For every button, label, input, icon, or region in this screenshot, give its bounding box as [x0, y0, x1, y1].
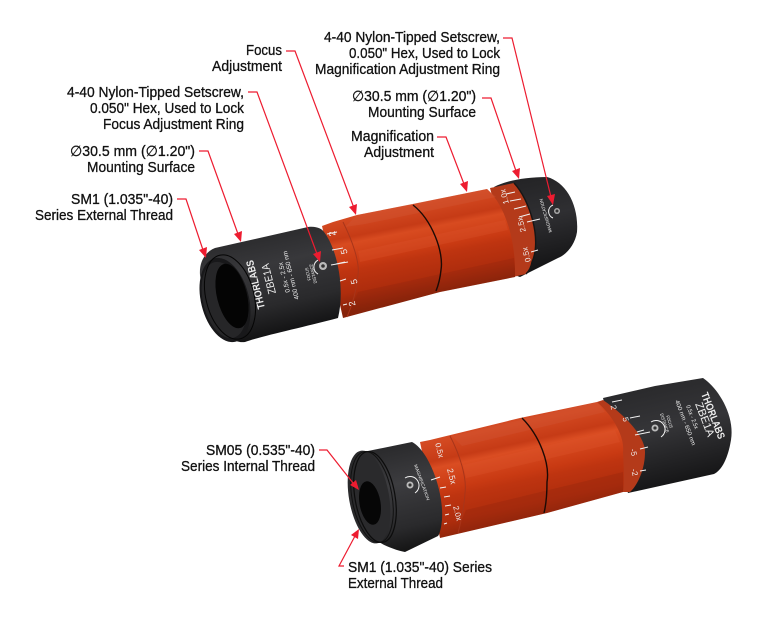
arrow: mounting surface right	[482, 98, 520, 179]
arrow: SM05	[319, 450, 359, 490]
magnification scale and marks: 2.0x	[451, 505, 464, 522]
band ridge	[450, 436, 465, 533]
far black cap	[603, 378, 732, 493]
arrow: magnification adjustment	[437, 137, 468, 192]
label: SM05 internal thread	[181, 443, 315, 475]
label: focus adjustment: Focus	[246, 43, 282, 59]
focus scale	[327, 230, 360, 307]
focus scale	[609, 400, 650, 477]
product markings: DISTANCE	[659, 413, 670, 433]
label: setscrew focus ring: 4-40 Nylon-Tipped Setscrew,	[67, 85, 244, 101]
label: setscrew magnification ring: 4-40 Nylon-Tipped Setscrew,	[324, 30, 500, 46]
magnification scale: MAGNIFICATION	[539, 198, 553, 233]
labels: upper unit	[35, 30, 501, 224]
magnification scale	[498, 188, 560, 263]
red barrel	[322, 189, 515, 318]
callout arrows	[177, 38, 555, 566]
label: mounting surface right: ∅30.5 mm (∅1.20")	[352, 89, 476, 105]
red barrel	[420, 402, 624, 538]
seam	[413, 205, 441, 291]
rear scale band	[490, 183, 536, 277]
magnification scale and marks: MAGNIFICATION	[413, 464, 431, 501]
label: mounting surface left: ∅30.5 mm (∅1.20")	[70, 144, 195, 160]
black ring lip	[514, 183, 536, 274]
label: mounting surface right: Mounting Surface	[368, 105, 476, 121]
lower beam expander	[341, 378, 732, 552]
label: mounting surface right	[352, 89, 476, 121]
front thread and aperture	[191, 249, 264, 348]
rear black cap	[494, 177, 577, 277]
front black cap	[200, 227, 341, 342]
arrow: setscrew focus	[248, 92, 321, 262]
product markings: 400 nm - 650 nm	[282, 250, 301, 300]
front thread and aperture	[341, 447, 403, 547]
focus scale: 2	[347, 300, 358, 307]
near black cap	[349, 442, 442, 552]
product markings: FOCUS	[304, 267, 312, 281]
magnification scale: 1.0x	[498, 188, 511, 205]
product markings: THORLABS	[244, 259, 268, 310]
label: setscrew focus ring: Focus Adjustment Ring	[103, 117, 244, 133]
arrow: setscrew magnification	[503, 38, 555, 205]
label: mounting surface left	[70, 144, 195, 176]
product markings: FOCUS	[665, 415, 674, 429]
product markings: 0.5x - 2.5x	[277, 261, 292, 293]
label: setscrew focus ring: 0.050" Hex, Used to Lock	[90, 101, 245, 117]
label: focus adjustment	[212, 43, 282, 75]
product markings: ZBE1A	[692, 401, 717, 439]
label: mounting surface left: Mounting Surface	[87, 160, 195, 176]
far scale band	[597, 400, 645, 492]
focus scale: 2	[327, 230, 338, 237]
label: SM05 internal thread: SM05 (0.535"-40)	[206, 443, 315, 459]
product markings: 400 nm - 650 nm	[673, 400, 696, 447]
magnification scale: 0.5x	[520, 246, 533, 263]
product markings: ZBE1A	[260, 262, 279, 295]
label: SM1 external thread: Series External Thread	[35, 208, 173, 224]
focus scale: -2	[629, 468, 640, 477]
focus scale: 5	[349, 278, 360, 285]
magnification scale: 2.5x	[515, 216, 528, 233]
focus scale: 2	[609, 404, 618, 411]
arrow: SM1 upper	[177, 199, 207, 258]
focus scale: -5	[628, 448, 639, 457]
label: setscrew magnification ring	[315, 30, 501, 78]
magnification scale and marks	[405, 442, 464, 524]
label: magnification adjustment: Magnification	[351, 129, 434, 145]
arrow: SM1 lower	[339, 529, 359, 566]
arrow: mounting surface left	[199, 151, 242, 242]
label: SM1 external thread: SM1 (1.035"-40)	[71, 192, 173, 208]
product markings: DISTANCE	[308, 263, 318, 284]
product markings: 0.5x - 2.5x	[684, 405, 699, 430]
seam	[522, 418, 548, 513]
magnification scale and marks: 0.5x	[433, 442, 446, 459]
focus scale: 5	[339, 248, 350, 255]
label: SM1 external thread lower: SM1 (1.035"-40) Series	[348, 560, 492, 576]
label: SM1 external thread lower	[348, 560, 492, 592]
product markings	[651, 391, 727, 447]
product markings	[244, 250, 327, 310]
label: SM05 internal thread: Series Internal Thread	[181, 459, 315, 475]
upper beam expander	[191, 177, 577, 348]
label: SM1 external thread lower: External Thread	[348, 576, 443, 592]
label: SM1 external thread	[35, 192, 173, 224]
product markings: THORLABS	[698, 391, 727, 441]
label: magnification adjustment: Adjustment	[364, 145, 434, 161]
label: setscrew magnification ring: Magnification Adjustment Ring	[315, 62, 500, 78]
focus scale: 5	[621, 416, 630, 423]
arrow: focus adjustment	[286, 51, 357, 215]
label: magnification adjustment	[351, 129, 434, 161]
label: focus adjustment: Adjustment	[212, 59, 282, 75]
label: setscrew magnification ring: 0.050" Hex, Used to Lock	[349, 46, 501, 62]
magnification scale and marks: 2.5x	[445, 467, 459, 486]
band ridge	[343, 222, 358, 317]
label: setscrew focus ring	[67, 85, 245, 133]
